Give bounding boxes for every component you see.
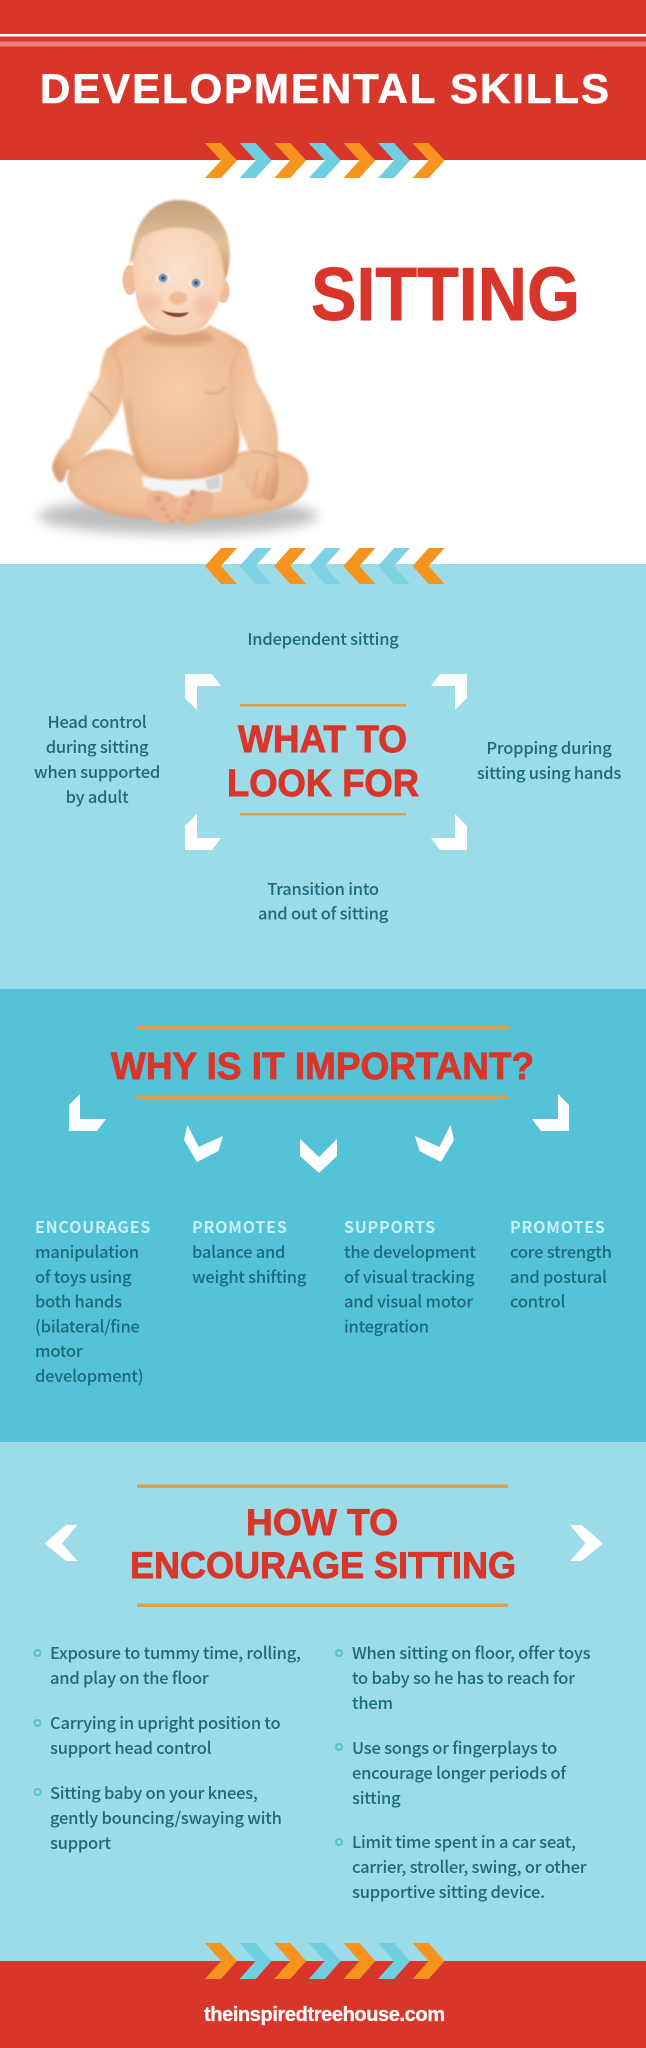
- column: promotes core: control: [510, 1289, 565, 1313]
- tip: songs: encourage longer periods of: [352, 1760, 567, 1784]
- chevron row: middle: [205, 548, 445, 584]
- column: encourages: ENCOURAGES: [35, 1214, 151, 1238]
- footer banner: [0, 1961, 646, 2048]
- column: promotes core: and postural: [510, 1264, 607, 1288]
- column: encourages: (bilateral/fine: [35, 1313, 140, 1337]
- column: supports: SUPPORTS: [344, 1214, 436, 1238]
- look-for item: transition: and out of sitting: [258, 900, 389, 924]
- ears: [122, 265, 138, 295]
- website: theinspiredtreehouse.com: [204, 2004, 445, 2026]
- tip: tummy time: [34, 1640, 301, 1689]
- column: encourages: both hands: [35, 1289, 122, 1313]
- tip: offer toys: [336, 1640, 591, 1714]
- look-for item: propping: Propping during: [486, 735, 612, 759]
- baby torso: [107, 325, 248, 480]
- column: promotes balance: [192, 1214, 307, 1288]
- tip: offer toys: to baby so he has to reach for: [352, 1665, 575, 1689]
- panel: how to encourage sitting: [0, 1442, 646, 1962]
- look-for item: head control: Head control: [48, 709, 147, 733]
- column: supports: the development: [344, 1239, 476, 1263]
- belly shading: [128, 400, 237, 474]
- heading: what to look for: WHAT TO: [238, 719, 407, 761]
- tip: upright carrying: Carrying in upright position to: [50, 1710, 280, 1734]
- subject title: SITTING: [311, 252, 580, 336]
- column: encourages: development): [35, 1363, 143, 1387]
- look-for item: head control: when supported: [34, 759, 160, 783]
- heading: why is it important: WHY IS IT IMPORTANT?: [111, 1046, 534, 1088]
- look-for item: head control: during sitting: [46, 734, 149, 758]
- look-for item: head control: by adult: [66, 784, 129, 808]
- tip: on your knees: support: [50, 1830, 112, 1854]
- heading: what to look for: LOOK FOR: [227, 763, 419, 805]
- tip: limit devices: supportive sitting device.: [352, 1879, 545, 1903]
- face: [133, 205, 228, 335]
- baby legs: [67, 449, 308, 519]
- column: promotes balance: PROMOTES: [192, 1214, 288, 1238]
- heading: what to look for: [227, 704, 419, 816]
- baby left arm and hand: [52, 347, 124, 482]
- column: promotes core: [510, 1214, 612, 1313]
- cheeks: [138, 293, 162, 313]
- nose: [169, 292, 187, 304]
- baby right arm and hand: [229, 347, 279, 501]
- column: encourages: motor: [35, 1338, 83, 1362]
- tip: upright carrying: [34, 1710, 280, 1759]
- eyes: [156, 273, 204, 288]
- column: encourages: of toys using: [35, 1264, 132, 1288]
- floor shadow: [38, 498, 318, 534]
- column: promotes balance: weight shifting: [192, 1264, 307, 1288]
- tip: on your knees: gently bouncing/swaying with: [50, 1805, 282, 1829]
- right arrow: [570, 1525, 603, 1561]
- tip: songs: sitting: [352, 1785, 401, 1809]
- tip: upright carrying: support head control: [50, 1735, 212, 1759]
- look-for item: propping: sitting using hands: [477, 760, 621, 784]
- column: promotes core: PROMOTES: [510, 1214, 606, 1238]
- baby head: [122, 200, 230, 346]
- tip: songs: Use songs or fingerplays to: [352, 1735, 557, 1759]
- mouth: [161, 310, 189, 317]
- column: supports: [344, 1214, 476, 1337]
- column: promotes balance: balance and: [192, 1239, 285, 1263]
- hair: [130, 200, 230, 280]
- look-for item: transition: Transition into: [267, 876, 379, 900]
- look-for item: independent sitting: Independent sitting: [247, 626, 399, 650]
- column: supports: integration: [344, 1313, 429, 1337]
- tip: on your knees: Sitting baby on your knees,: [50, 1780, 258, 1804]
- white arrows pointing to columns: [69, 1094, 569, 1173]
- chevron row: top: [205, 143, 445, 178]
- header banner: [0, 0, 646, 160]
- tip: tummy time: Exposure to tummy time, rolling,: [50, 1640, 301, 1664]
- tip: offer toys: When sitting on floor, offer toys: [352, 1640, 591, 1664]
- column: encourages: [35, 1214, 151, 1387]
- chevron row: bottom: [205, 1943, 445, 1979]
- panel: white background with baby and subject: [0, 160, 646, 565]
- column: supports: and visual motor: [344, 1289, 473, 1313]
- panel: why is it important: [0, 989, 646, 1442]
- tip: on your knees: [34, 1780, 282, 1854]
- column: encourages: manipulation: [35, 1239, 139, 1263]
- column: supports: of visual tracking: [344, 1264, 475, 1288]
- tip: limit devices: carrier, stroller, swing, or other: [352, 1854, 587, 1878]
- tip: limit devices: [336, 1829, 587, 1903]
- panel: what to look for: [0, 564, 646, 989]
- baby feet: [146, 490, 214, 525]
- tip: songs: [336, 1735, 567, 1809]
- heading: why is it important: [111, 1026, 534, 1099]
- illustration: sitting baby: [38, 200, 318, 534]
- main title: DEVELOPMENTAL SKILLS: [40, 65, 609, 112]
- heading: how to encourage sitting: ENCOURAGE SITTING: [130, 1545, 516, 1586]
- column: promotes core: core strength: [510, 1239, 612, 1263]
- tip: limit devices: Limit time spent in a car seat,: [352, 1829, 576, 1853]
- heading: how to encourage sitting: HOW TO: [246, 1502, 398, 1543]
- diaper: [142, 474, 222, 497]
- white corner brackets: [185, 674, 467, 850]
- heading: how to encourage sitting: [130, 1484, 516, 1607]
- neck shadow: [142, 330, 214, 346]
- left arrow: [44, 1525, 78, 1561]
- tip: offer toys: them: [352, 1690, 393, 1714]
- tip: tummy time: and play on the floor: [50, 1665, 209, 1689]
